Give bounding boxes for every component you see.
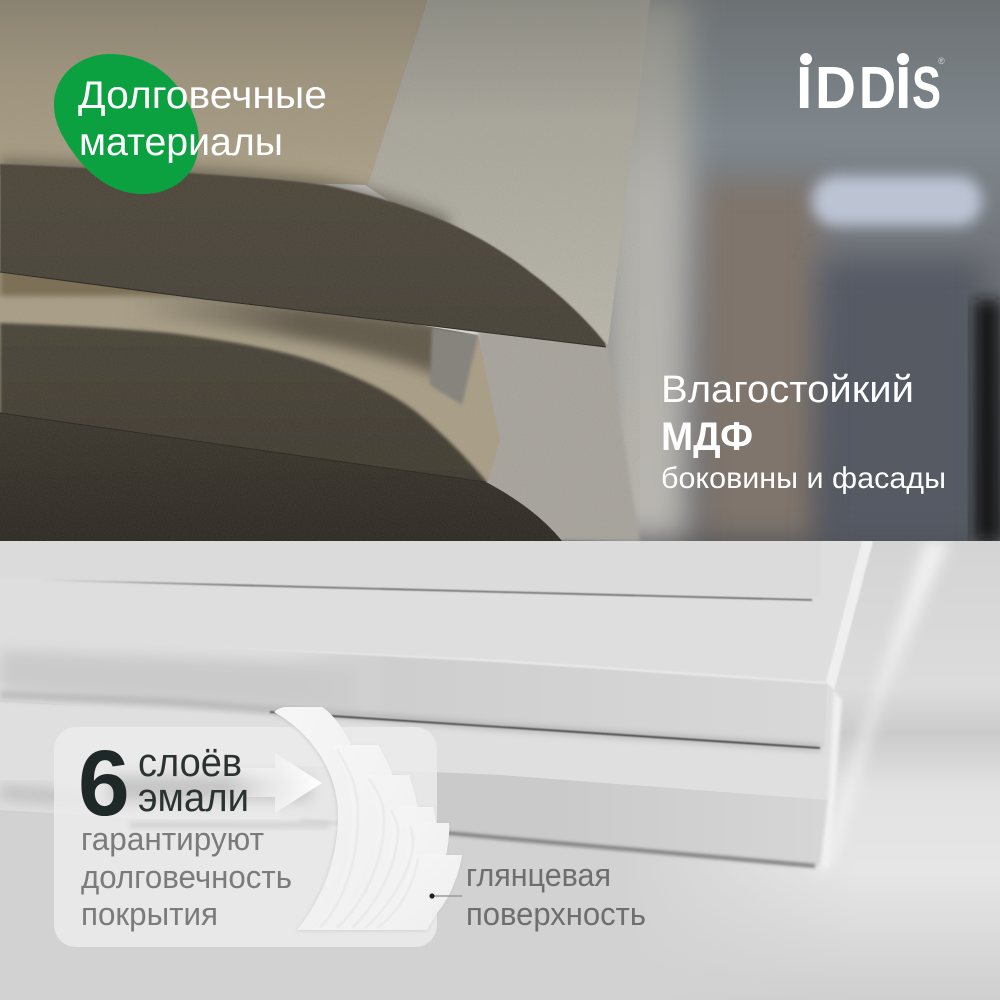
- icon: arrow: [225, 753, 322, 813]
- panel: third board: [0, 413, 562, 541]
- text block: glossy surface: [466, 857, 646, 932]
- text block: moisture-resistant MDF: МДФ: [661, 415, 753, 459]
- logo: IDDIS: [796, 53, 945, 121]
- panel: second board: [0, 272, 500, 482]
- logo: IDDIS: ®: [938, 56, 945, 66]
- callout: pointer to glossy surface: [429, 893, 462, 899]
- logo: IDDIS: S: [912, 55, 941, 121]
- label: layers of enamel: эмали: [138, 776, 249, 820]
- panel: MDF photo background: [0, 0, 1000, 541]
- text block: moisture-resistant MDF: [661, 369, 946, 495]
- logo: IDDIS: I: [895, 55, 911, 121]
- text block: moisture-resistant MDF: боковины и фасады: [661, 462, 946, 495]
- logo: IDDIS: D: [815, 55, 856, 121]
- logo: IDDIS: I: [796, 55, 812, 121]
- number: 6: 6: [78, 731, 130, 835]
- text block: guarantee durability: покрытия: [81, 896, 218, 932]
- logo: IDDIS: D: [859, 55, 896, 121]
- heading: durable materials: материалы: [79, 121, 283, 164]
- icon: green blob: [54, 54, 199, 194]
- text block: guarantee durability: гарантируют: [81, 821, 264, 857]
- icon: stacked enamel layers: [274, 707, 462, 930]
- text block: guarantee durability: [81, 821, 292, 932]
- label: layers of enamel: [138, 741, 249, 820]
- text block: guarantee durability: долговечность: [81, 859, 292, 895]
- label: layers of enamel: слоёв: [138, 741, 242, 785]
- panel: white enamel photo background: [0, 541, 1000, 916]
- panel: first board: [0, 158, 608, 360]
- heading: durable materials: [78, 74, 327, 164]
- text block: glossy surface: глянцевая: [466, 857, 611, 893]
- text block: moisture-resistant MDF: Влагостойкий: [661, 369, 914, 411]
- panel: enamel layers callout: [54, 727, 437, 947]
- text block: glossy surface: поверхность: [466, 896, 646, 932]
- heading: durable materials: Долговечные: [78, 74, 327, 117]
